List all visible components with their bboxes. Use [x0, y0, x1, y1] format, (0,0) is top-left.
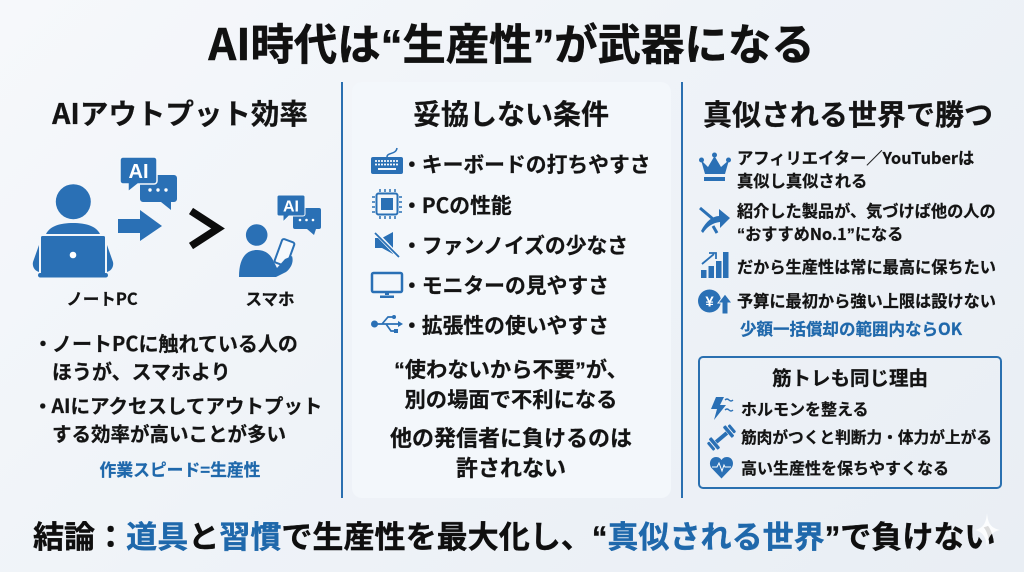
caption: laptop: ノートPC — [66, 286, 138, 310]
text block: cannot lose: 許されない — [456, 451, 566, 483]
text block: cannot lose: 他の発信者に負けるのは — [390, 421, 632, 453]
callout: speed equals productivity: 作業スピード=生産性 — [100, 457, 260, 481]
text: products become recommendations — [737, 198, 996, 244]
list item: keyboard: ・キーボードの打ちやすさ — [402, 148, 651, 178]
conclusion banner: 結論：道具と習慣で生産性を最大化し、“真似される世界”で負けない — [33, 512, 995, 557]
text block: laptop advantage: ・ノートPCに触れている人の — [33, 328, 298, 357]
list item: monitor: ・モニターの見やすさ — [402, 269, 609, 299]
panel: win in a world of imitation — [703, 92, 996, 340]
heading: win in imitation world: 真似される世界で勝つ — [703, 92, 993, 134]
text block: access efficiency: する効率が高いことが多い — [52, 418, 286, 447]
text block: laptop advantage: ほうが、スマホより — [52, 356, 231, 385]
heading: same reason: 筋トレも同じ理由 — [772, 362, 928, 391]
heading: AI output efficiency: AIアウトプット効率 — [52, 92, 308, 133]
panel: AI output efficiency — [33, 92, 322, 481]
list item: expandability: ・拡張性の使いやすさ — [402, 309, 609, 339]
text block: cannot lose — [390, 421, 632, 483]
text: products become recommendations: 紹介した製品が、気づけば他の人の — [737, 198, 996, 222]
text: muscle improves judgment: 筋肉がつくと判断力・体力が上がる — [741, 425, 992, 448]
list item: PC performance: ・PCの性能 — [402, 189, 512, 219]
text: products become recommendations: “おすすめNo.1”になる — [737, 220, 903, 244]
text: keep productivity highest: だから生産性は常に最高に保ちたい — [737, 254, 996, 278]
icon: AI chat bubbles small: AI — [283, 198, 299, 216]
text block: unneeded now: “使わないから不要”が、 — [394, 353, 628, 384]
text: no strict budget cap: 予算に最初から強い上限は設けない — [737, 288, 996, 312]
text block: unneeded now — [394, 353, 628, 414]
icon: yen with up arrow: ¥ — [705, 294, 714, 310]
panel: uncompromising conditions — [390, 93, 651, 483]
left divider — [341, 82, 343, 498]
text: hormones: ホルモンを整える — [741, 396, 869, 420]
text: imitation among affiliates: アフィリエイター／YouTuberは — [737, 144, 974, 168]
caption: smartphone: スマホ — [245, 286, 294, 310]
text: maintain productivity: 高い生産性を保ちやすくなる — [741, 455, 949, 479]
heading: uncompromising conditions: 妥協しない条件 — [413, 93, 609, 133]
text block: laptop advantage — [33, 328, 298, 385]
panel: same reason for strength training — [698, 356, 1002, 489]
title: AI時代は“生産性”が武器になる — [208, 11, 815, 73]
list item: fan noise: ・ファンノイズの少なさ — [402, 229, 628, 259]
callout: depreciation limit: 少額一括償却の範囲内ならOK — [740, 316, 962, 340]
center panel background — [352, 82, 671, 498]
text block: unneeded now: 別の場面で不利になる — [404, 383, 617, 414]
text block: access efficiency: ・AIにアクセスしてアウトプット — [33, 390, 322, 419]
text block: access efficiency — [33, 390, 322, 447]
text: imitation among affiliates: 真似し真似される — [737, 168, 867, 192]
icon: AI chat bubbles large: AI — [128, 161, 148, 183]
text: imitation among affiliates — [737, 144, 974, 192]
right divider — [681, 82, 683, 498]
